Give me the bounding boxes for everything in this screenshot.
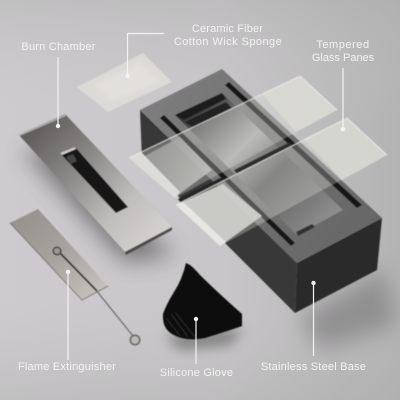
scene objects — [10, 53, 387, 345]
label: ceramic fiber: Ceramic Fiber — [192, 23, 263, 35]
glass pane: upper — [129, 76, 337, 198]
label: flame extinguisher: Flame Extinguisher — [18, 361, 116, 373]
label: silicone glove: Silicone Glove — [160, 367, 233, 379]
label: silicone glove — [160, 317, 233, 379]
flame extinguisher — [10, 209, 140, 345]
silicone glove — [163, 263, 242, 339]
label: ceramic fiber: Cotton Wick Sponge — [174, 36, 282, 48]
label: burn chamber: Burn Chamber — [21, 41, 96, 53]
stainless steel base — [140, 69, 382, 313]
burn chamber — [19, 114, 172, 255]
sponge — [77, 53, 172, 112]
tempered glass panes — [129, 76, 387, 246]
label: burn chamber — [21, 41, 96, 128]
dark gap between glass panes — [178, 142, 293, 203]
label: tempered glass panes — [312, 39, 375, 131]
label: stainless steel base — [261, 281, 366, 373]
label: tempered glass panes: Tempered — [316, 39, 370, 51]
label: tempered glass panes: Glass Panes — [312, 52, 375, 64]
glass pane: lower — [176, 118, 387, 246]
label: ceramic fiber — [125, 23, 282, 78]
shadows — [22, 150, 396, 350]
label: stainless steel base: Stainless Steel Base — [261, 361, 366, 373]
label: flame extinguisher — [18, 270, 116, 373]
